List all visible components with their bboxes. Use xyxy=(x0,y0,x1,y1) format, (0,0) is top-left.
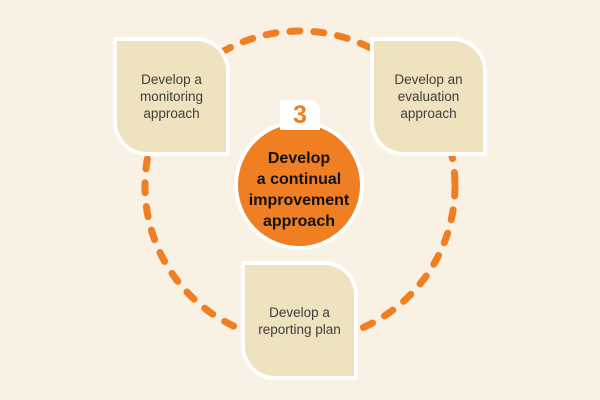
central text xyxy=(249,150,349,230)
number tab xyxy=(280,100,320,130)
central circle xyxy=(234,120,364,250)
number tab: 3 xyxy=(293,101,307,129)
leaf: monitoring: monitoring xyxy=(140,89,203,104)
leaf: monitoring: Develop a xyxy=(141,72,202,87)
leaf: monitoring xyxy=(113,37,230,156)
central text: improvement xyxy=(249,192,349,209)
leaf: reporting xyxy=(241,261,358,380)
leaf: reporting: reporting plan xyxy=(258,322,341,336)
leaf: evaluation: Develop an xyxy=(394,72,463,87)
leaf: evaluation xyxy=(370,37,487,156)
leaf: evaluation: evaluation xyxy=(398,89,459,104)
leaf: evaluation: approach xyxy=(400,106,457,121)
central text: a continual xyxy=(257,171,341,188)
leaf: monitoring: approach xyxy=(143,106,200,121)
central text: Develop xyxy=(268,150,330,167)
central text: approach xyxy=(263,213,335,230)
leaf: reporting: Develop a xyxy=(269,304,330,320)
